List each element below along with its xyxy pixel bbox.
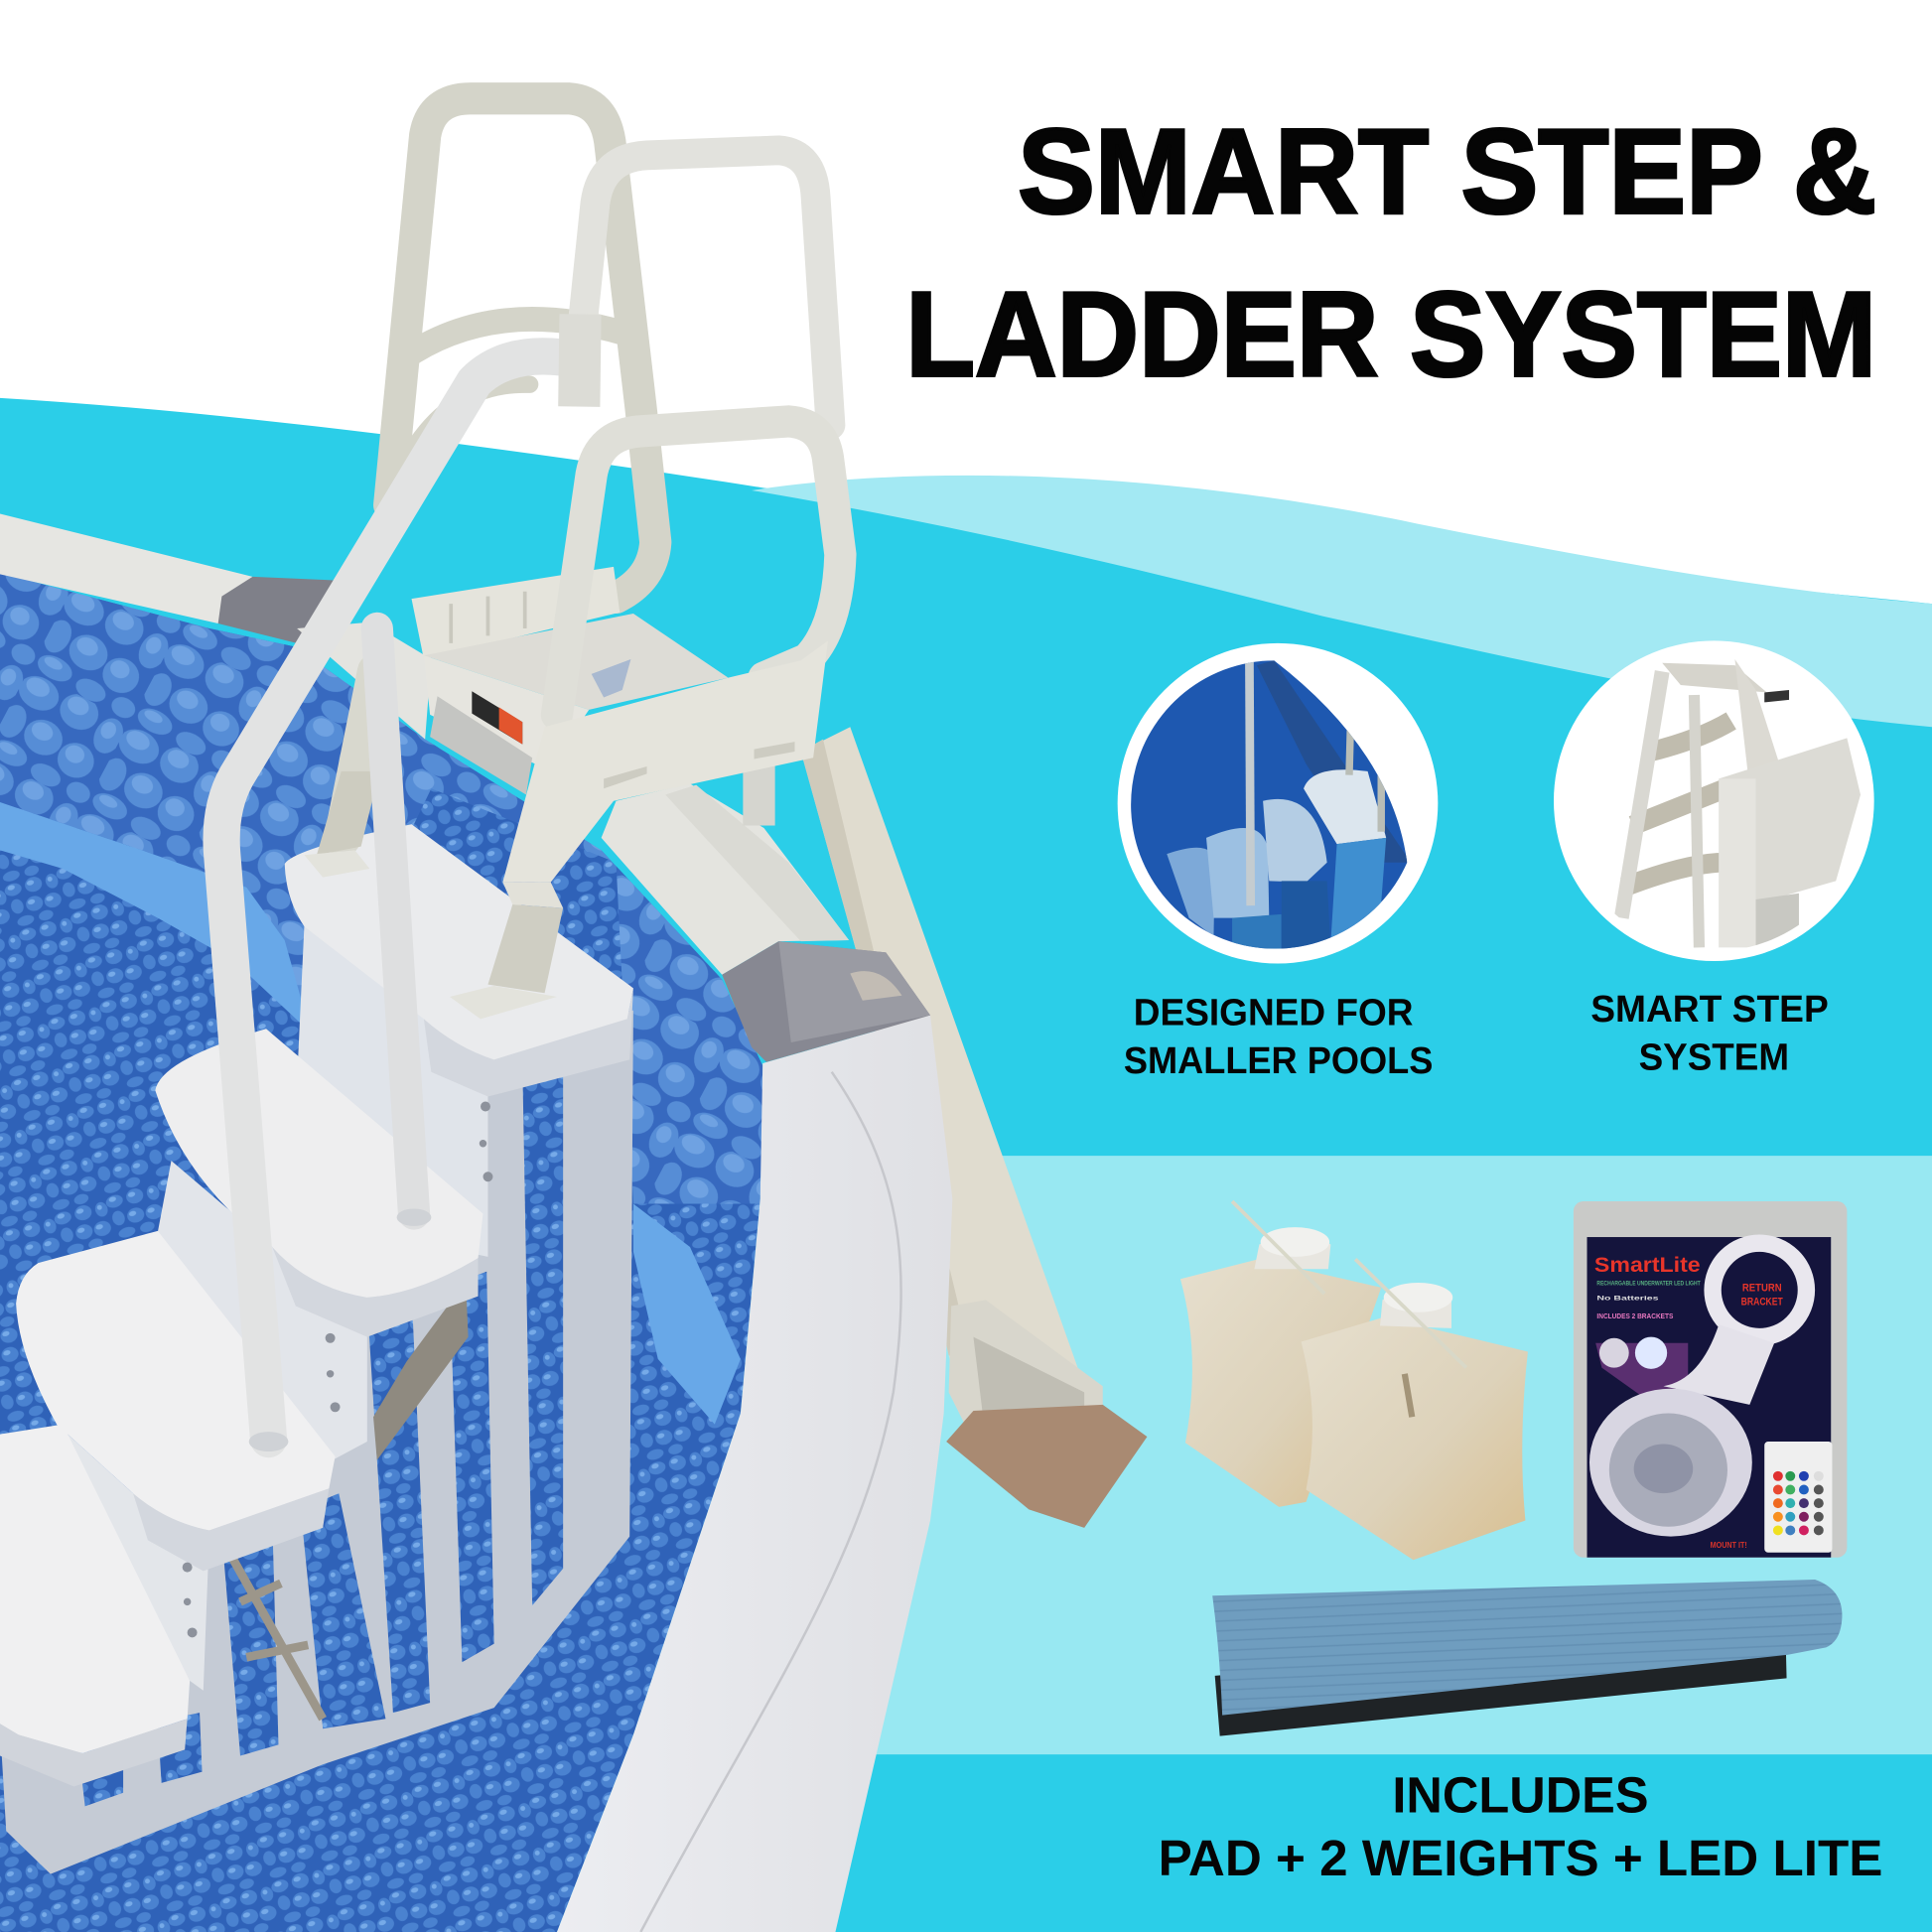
warning label — [472, 691, 522, 745]
front pool rim — [557, 1016, 952, 1932]
panel openings — [78, 1053, 563, 1806]
icon: LED light package: No Batteries — [1596, 1295, 1659, 1302]
icon: LED light package: INCLUDES 2 BRACKETS — [1596, 1311, 1673, 1320]
icon: rolled pad — [1212, 1580, 1842, 1736]
background: cyan wave — [0, 398, 1932, 1932]
pool liner photo — [0, 567, 788, 1932]
left hand rail — [221, 356, 561, 1440]
caption: includes list — [1159, 1767, 1882, 1886]
background: bottom caption band — [788, 1754, 1932, 1932]
icon: LED light package: RECHARGABLE UNDERWATER LED LIGHT — [1596, 1280, 1701, 1287]
back pool rim and connector — [0, 514, 431, 740]
front ladder yoke — [305, 640, 828, 1019]
title: LADDER SYSTEM — [905, 267, 1876, 402]
icon: LED light package: RETURN — [1742, 1283, 1782, 1295]
lower ladder handle — [557, 421, 840, 715]
step and panel assembly — [0, 824, 633, 1874]
back textured ladder frame — [389, 98, 655, 598]
tall ladder handle — [579, 150, 830, 425]
supports seen through the panel — [373, 1282, 469, 1460]
caption: designed for smaller pools: DESIGNED FOR — [1134, 993, 1414, 1035]
front pool rim, back section — [602, 763, 849, 975]
title — [905, 104, 1876, 402]
caption: includes list: INCLUDES — [1392, 1767, 1649, 1824]
step 4 — [0, 1425, 190, 1753]
rear leg — [343, 671, 376, 838]
circle: designed for smaller pools — [1118, 643, 1438, 964]
caption: smart step system — [1590, 989, 1829, 1078]
icon: LED light package: MOUNT IT! — [1711, 1540, 1747, 1550]
ribbed back board — [412, 567, 620, 659]
step 2 — [272, 1247, 479, 1337]
front rail pipes — [343, 150, 840, 838]
ladder platform — [412, 567, 728, 794]
step bodies — [272, 924, 487, 1257]
outer pool ladder behind the rim — [801, 727, 1147, 1528]
circle: smart step system — [1554, 640, 1874, 961]
step 3 — [133, 1488, 329, 1571]
hand rail poles — [221, 314, 581, 1451]
icon: sand weight bag back — [1180, 1201, 1381, 1507]
platform top — [424, 614, 728, 710]
platform side and grey box — [424, 655, 589, 770]
caption: designed for smaller pools: SMALLER POOLS — [1124, 1040, 1433, 1082]
step 1 — [424, 988, 633, 1097]
caption: designed for smaller pools — [1124, 993, 1433, 1082]
icon: LED light package — [1574, 1201, 1847, 1558]
caption: smart step system: SYSTEM — [1639, 1036, 1789, 1078]
icon: LED light package: SmartLite — [1594, 1254, 1701, 1277]
stair side panel — [0, 1011, 633, 1874]
title: SMART STEP & — [1018, 104, 1876, 239]
panel adjustment holes — [183, 1102, 492, 1637]
caption: includes list: PAD + 2 WEIGHTS + LED LITE — [1159, 1830, 1882, 1886]
background: light cyan swoosh — [752, 476, 1932, 727]
middle pole — [377, 628, 414, 1213]
icon: sand weight bag front — [1302, 1259, 1528, 1560]
caption: smart step system: SMART STEP — [1590, 989, 1829, 1031]
grey rim connector — [722, 941, 930, 1062]
background: accessories panel — [788, 1156, 1932, 1754]
icon: LED light package: BRACKET — [1741, 1296, 1783, 1308]
